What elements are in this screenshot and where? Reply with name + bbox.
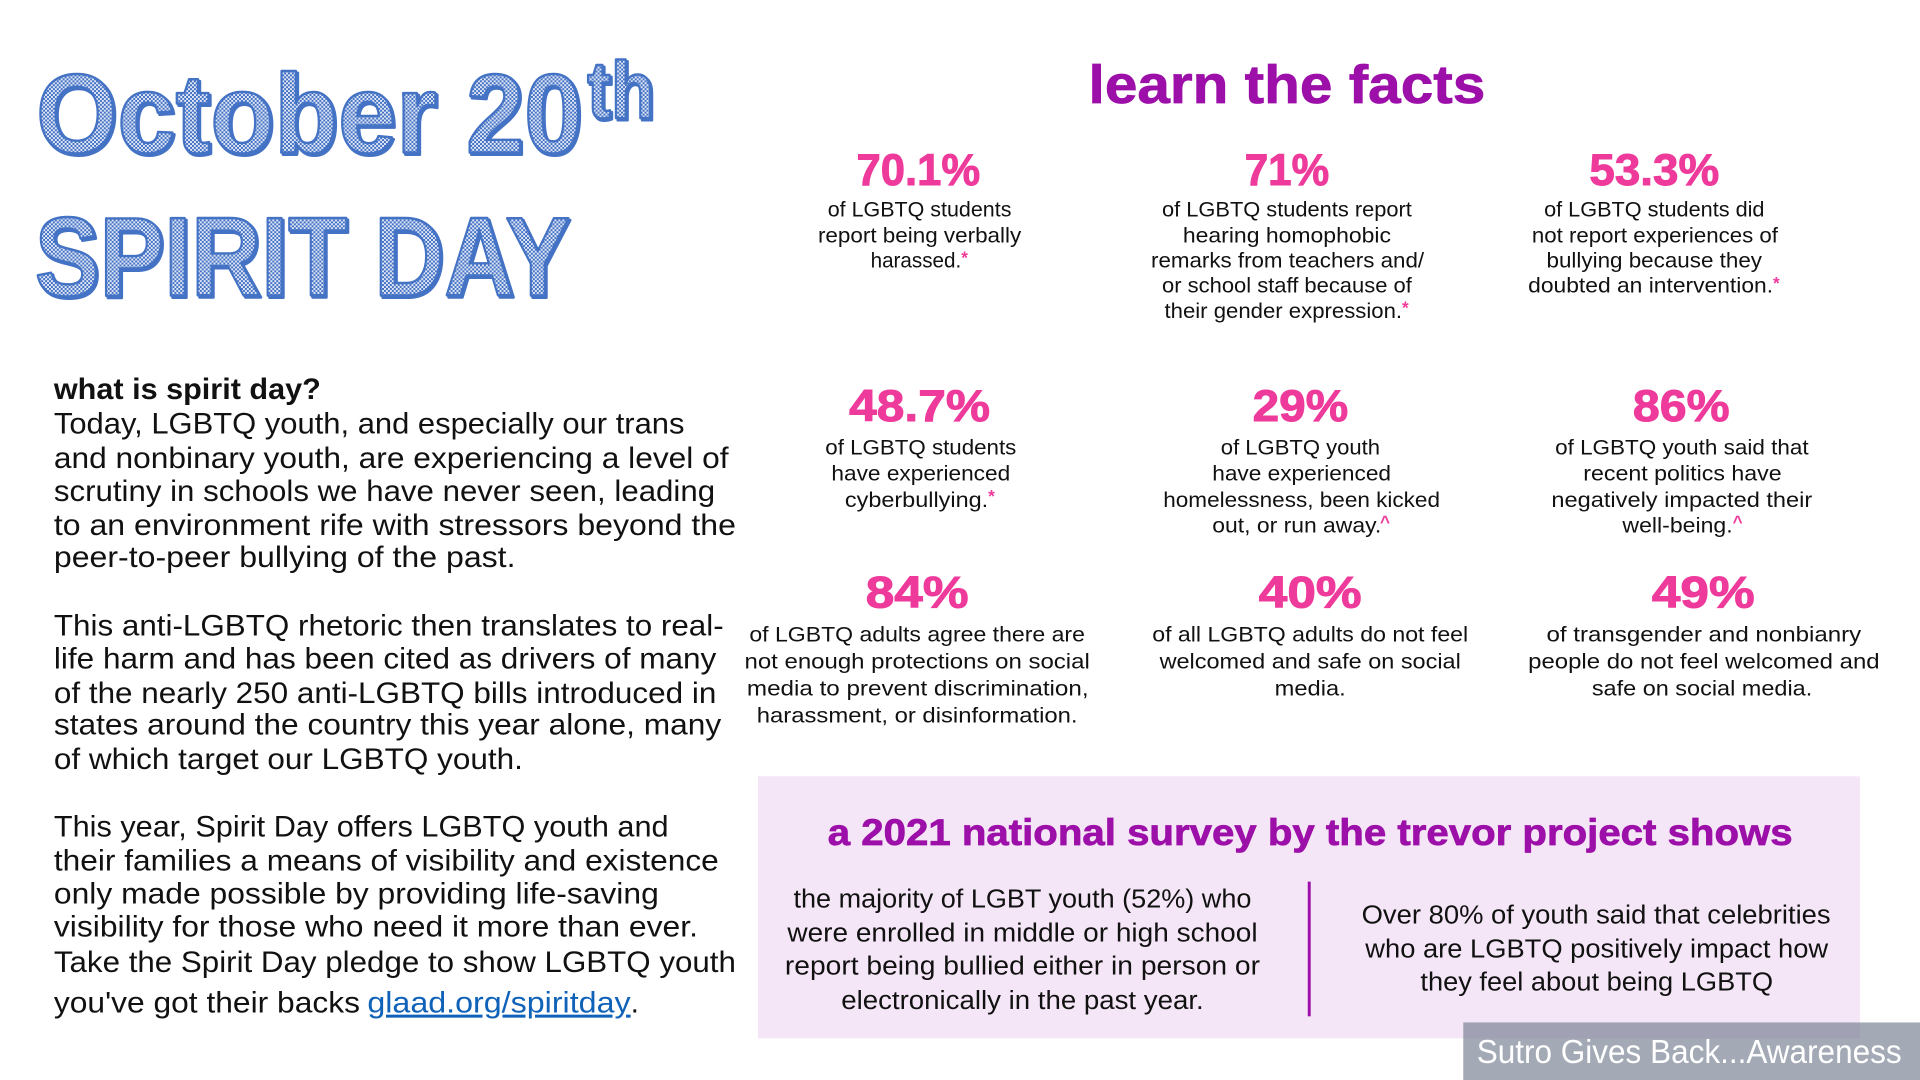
panel text: bullying finding: electronically in the past year. — [841, 985, 1204, 1015]
stat: 29%: homelessness, been kicked — [1163, 489, 1440, 512]
title line: SPIRIT DAY: SPIRIT DAY — [37, 196, 572, 322]
stat: 49% — [1528, 568, 1880, 701]
paragraph 3 — [54, 810, 736, 1020]
paragraph 2: life harm and has been cited as drivers of many — [54, 643, 716, 676]
stat: 70.1%: 70.1% — [857, 146, 980, 195]
stat: 29%: of LGBTQ youth — [1221, 436, 1380, 459]
stat: 84%: not enough protections on social — [744, 651, 1090, 674]
stat: 84% — [744, 568, 1090, 727]
paragraph 2: states around the country this year alone, many — [54, 709, 721, 742]
stat: 29%: 29% — [1253, 382, 1348, 431]
subheading: what is spirit day? — [53, 373, 321, 406]
caption bar: Sutro Gives Back: Sutro Gives Back...Awareness — [1477, 1034, 1902, 1071]
stat: 71%: remarks from teachers and/ — [1151, 250, 1424, 273]
paragraph 1: and nonbinary youth, are experiencing a level of — [54, 442, 729, 475]
panel text: celebrities finding: who are LGBTQ positively impact how — [1364, 934, 1829, 964]
paragraph 2: This anti-LGBTQ rhetoric then translates to real- — [54, 610, 724, 643]
panel text: bullying finding: report being bullied either in person or — [785, 951, 1260, 981]
paragraph 2 — [54, 610, 724, 776]
stat: 71% — [1151, 146, 1424, 323]
stat: 53.3%: not report experiences of — [1532, 224, 1778, 247]
stat: 48.7%: 48.7% — [849, 382, 990, 431]
panel text: bullying finding: were enrolled in middle or high school — [786, 918, 1258, 948]
title line: October 20th: October 20 — [38, 52, 584, 178]
stat: 71%: their gender expression. — [1164, 300, 1402, 323]
stat: 70.1%: of LGBTQ students — [828, 199, 1011, 222]
paragraph 3: you've got their backs — [54, 987, 360, 1020]
stat: 70.1%: harassed. — [871, 250, 961, 273]
stat: 84%: harassment, or disinformation. — [757, 704, 1078, 727]
stat: 84%: 84% — [866, 568, 969, 617]
stat: 29%: ^ — [1380, 512, 1390, 532]
stat: 29%: out, or run away. — [1212, 515, 1381, 538]
text block: what is spirit day — [53, 373, 736, 1020]
paragraph 1: peer-to-peer bullying of the past. — [54, 541, 516, 574]
panel: 2021 national survey — [758, 776, 1860, 1038]
panel text: celebrities finding: they feel about being LGBTQ — [1420, 967, 1773, 997]
stat: 53.3%: bullying because they — [1547, 250, 1763, 273]
paragraph 1 — [54, 407, 736, 574]
stat: 48.7%: have experienced — [831, 463, 1010, 486]
paragraph 3: only made possible by providing life-saving — [54, 878, 659, 911]
paragraph 3: This year, Spirit Day offers LGBTQ youth and — [54, 810, 669, 843]
stat: 40%: welcomed and safe on social — [1158, 651, 1461, 674]
stat: 53.3%: doubted an intervention. — [1528, 275, 1773, 298]
stat: 86% — [1551, 382, 1812, 538]
stat: 84%: media to prevent discrimination, — [747, 678, 1089, 701]
stat: 70.1% — [818, 146, 1022, 273]
panel text: bullying finding — [785, 883, 1260, 1015]
stat: 29% — [1163, 382, 1440, 538]
paragraph 2: of the nearly 250 anti-LGBTQ bills introduced in — [54, 677, 716, 710]
paragraph 3: visibility for those who need it more than ever. — [54, 911, 698, 944]
stat: 48.7% — [825, 382, 1016, 512]
stat: 53.3%: of LGBTQ students did — [1544, 199, 1764, 222]
stat: 40% — [1152, 568, 1468, 701]
panel text: bullying finding: the majority of LGBT youth (52%) who — [793, 883, 1251, 913]
paragraph 3: their families a means of visibility and existence — [54, 845, 719, 878]
paragraph 1: Today, LGBTQ youth, and especially our trans — [54, 407, 684, 440]
panel heading: a 2021 national survey by the trevor project shows — [828, 812, 1793, 853]
title line: October 20th: th — [589, 48, 656, 138]
stat: 29%: have experienced — [1212, 463, 1391, 486]
stat: 53.3%: * — [1773, 273, 1780, 293]
heading: learn the facts: learn the facts — [1089, 55, 1485, 115]
stat: 49%: of transgender and nonbianry — [1547, 624, 1862, 647]
stat: 53.3% — [1528, 146, 1780, 298]
paragraph 3: glaad.org/spiritday — [367, 987, 631, 1020]
title line: October 20th: October 20 — [36, 50, 582, 176]
stat: 86%: ^ — [1733, 512, 1743, 532]
stat: 53.3%: 53.3% — [1589, 146, 1719, 195]
stat: 49%: people do not feel welcomed and — [1528, 651, 1880, 674]
stat: 71%: or school staff because of — [1162, 275, 1412, 298]
panel text: celebrities finding: Over 80% of youth said that celebrities — [1362, 899, 1831, 929]
paragraph 1: to an environment rife with stressors beyond the — [54, 509, 736, 542]
stat: 71%: hearing homophobic — [1183, 224, 1391, 247]
title line: October 20th: th — [587, 46, 654, 136]
stat: 86%: of LGBTQ youth said that — [1555, 436, 1809, 459]
paragraph 2: of which target our LGBTQ youth. — [54, 743, 523, 776]
stat: 84%: of LGBTQ adults agree there are — [749, 624, 1085, 647]
stat: 48.7%: * — [988, 486, 995, 506]
caption bar: Sutro Gives Back — [1463, 1022, 1920, 1080]
stat: 86%: 86% — [1633, 382, 1730, 431]
stat: 71%: 71% — [1245, 146, 1329, 195]
stat: 70.1%: * — [961, 247, 968, 267]
stat: 40%: 40% — [1259, 568, 1362, 617]
stat: 71%: * — [1402, 297, 1409, 317]
stat: 86%: negatively impacted their — [1551, 489, 1812, 512]
stat: 40%: media. — [1275, 678, 1346, 701]
stat: 48.7%: cyberbullying. — [845, 489, 988, 512]
panel text: celebrities finding — [1362, 899, 1831, 997]
paragraph 3: Take the Spirit Day pledge to show LGBTQ youth — [54, 946, 736, 979]
title: October 20th Spirit Day — [35, 46, 656, 322]
stat: 71%: of LGBTQ students report — [1162, 199, 1412, 222]
paragraph 3: . — [631, 987, 639, 1020]
stat: 86%: recent politics have — [1583, 463, 1782, 486]
stat: 70.1%: report being verbally — [818, 224, 1022, 247]
stat: 49%: 49% — [1652, 568, 1755, 617]
stat: 49%: safe on social media. — [1592, 678, 1812, 701]
stat: 48.7%: of LGBTQ students — [825, 436, 1016, 459]
title line: SPIRIT DAY: SPIRIT DAY — [35, 194, 570, 320]
paragraph 1: scrutiny in schools we have never seen, leading — [54, 475, 715, 508]
stat: 86%: well-being. — [1621, 515, 1733, 538]
stat: 40%: of all LGBTQ adults do not feel — [1152, 624, 1468, 647]
